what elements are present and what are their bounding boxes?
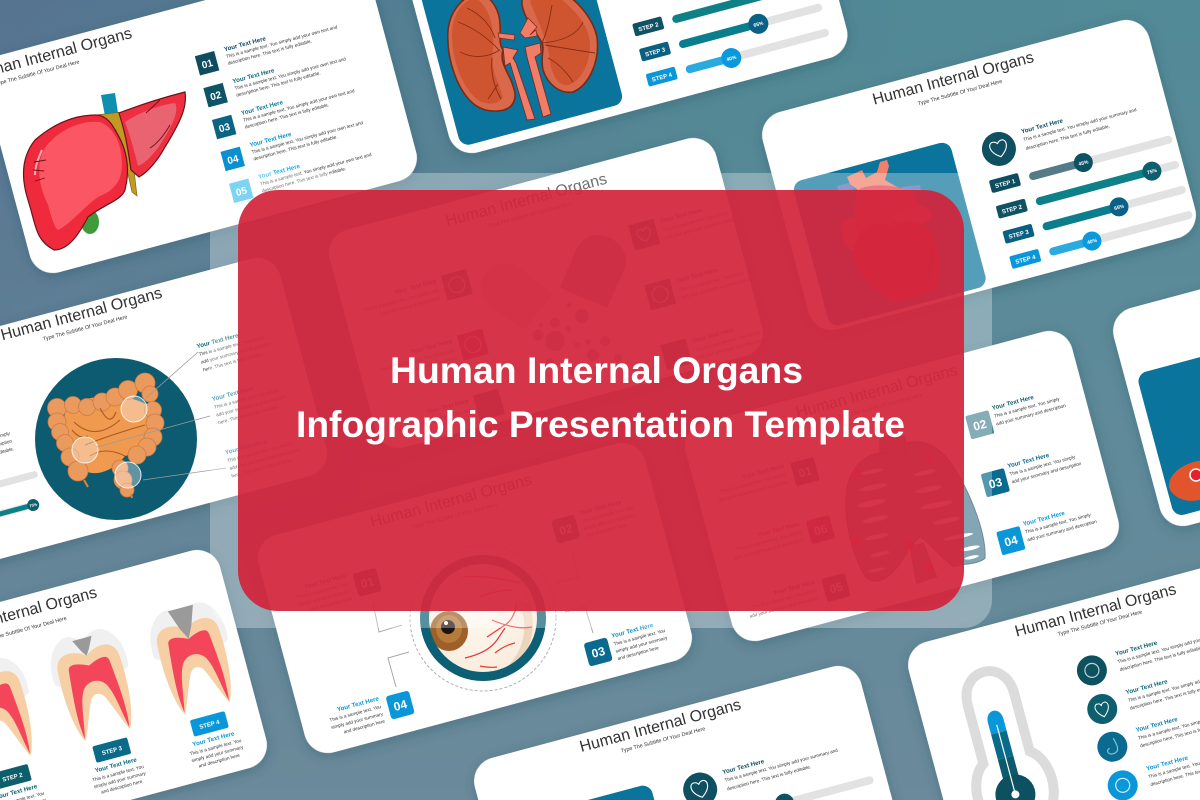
numbered list: This is a sample text. You simply add your own text and [260, 152, 372, 187]
icon: ribcage [846, 437, 985, 583]
thermometer slide title: Human Internal Organs [1013, 581, 1178, 641]
list item: brain: Your Text Here [1115, 640, 1159, 658]
heart slide subtitle: Type The Subtitle Of Your Deal Here [917, 79, 1003, 107]
item 02: 02 [558, 521, 574, 538]
text block: This is a sample text. You simply add your summary and [724, 748, 839, 783]
item 02: Your Text Here [579, 499, 623, 517]
right list: This is a sample text. You simply [694, 330, 762, 352]
numbered list: 05 [235, 185, 249, 199]
left items: This is a sample text. You simply [751, 587, 818, 610]
right list: Your Text Here [659, 207, 703, 225]
list item: brain [1074, 619, 1200, 689]
numbered list: 02 [209, 90, 223, 103]
heart image panel [792, 141, 988, 328]
text block: description here. This text is fully editable. [726, 764, 812, 792]
right items: This is a sample text. You simply [1009, 454, 1076, 477]
left list: Your Text Here [410, 338, 454, 356]
item 03: and description here [617, 645, 660, 661]
progress bars: STEP 3 [1008, 229, 1030, 241]
panel: lower heart slide [469, 661, 913, 800]
step 2 block [0, 761, 47, 800]
list item: heart [1084, 657, 1200, 727]
numbered list: Your Text Here [249, 131, 293, 149]
step 2 block: STEP 2 [2, 772, 24, 784]
image panel [1136, 333, 1200, 517]
ribcage slide subtitle: Type The Subtitle Of Your Deal Here [838, 393, 924, 421]
step 3 block [84, 735, 149, 796]
numbered list: Your Text Here [257, 163, 301, 181]
progress bars: 45% [1078, 159, 1090, 168]
right text items: here. This text is fully editable. [202, 351, 264, 372]
list item: stomach [1094, 695, 1200, 765]
list item: heart: Your Text Here [1125, 678, 1169, 696]
panel: eye slide [253, 438, 697, 758]
right list: Your Text Here [676, 267, 719, 285]
left items: This is a sample text. You simply [720, 472, 787, 494]
panel: capsule slide [324, 132, 770, 453]
item 04: simply add your summary [331, 711, 384, 730]
text block [1020, 98, 1140, 151]
left items: 05 [828, 579, 845, 597]
item 01: Your Text Here [303, 573, 347, 591]
eye slide subtitle: Type The Subtitle Of Your Deal Here [412, 502, 498, 531]
step 4 block: This is a sample text. You [189, 738, 242, 756]
item 04: This is a sample text. You [329, 704, 382, 723]
numbered list: 04 [226, 154, 240, 167]
right list [628, 198, 769, 370]
panel: kidney slide [396, 0, 853, 158]
left text and bars [0, 427, 43, 537]
right items: Your Text Here [1022, 510, 1066, 528]
panel: liver slide [0, 0, 422, 281]
right list: add your summary and description. [664, 217, 736, 240]
right items: 04 [1003, 533, 1020, 550]
left list: This is a sample text. You simply add [396, 407, 472, 432]
item 04 [326, 687, 415, 737]
right text items: Your Text Here [196, 332, 240, 350]
panel: right edge slide [1108, 211, 1200, 531]
right items: add your summary and description [996, 403, 1067, 426]
right items: Your Text Here [1007, 452, 1051, 470]
markers on ribcage [852, 454, 934, 572]
progress bars: STEP 1 [995, 179, 1017, 190]
numbered list: description here. This text is fully editable. [236, 70, 321, 98]
icon: heart [837, 160, 939, 302]
kidney image panel [411, 0, 624, 147]
icon: tooth 2 [0, 652, 46, 772]
numbered list: 01 [201, 58, 215, 72]
numbered list: This is a sample text. You simply add your own text and [242, 88, 355, 123]
image panel [495, 783, 689, 800]
numbered list [194, 17, 375, 203]
right list: This is a sample text. You simply [662, 210, 729, 233]
progress bar [732, 771, 872, 800]
left items: 06 [812, 521, 829, 539]
progress bars: 40% [1087, 238, 1098, 246]
ribcage slide title: Human Internal Organs [794, 362, 959, 422]
left items [714, 455, 851, 623]
left list: your own text and description. [396, 355, 457, 376]
right text items: add your summary and description [200, 341, 271, 365]
item 01: 01 [359, 574, 376, 591]
item 04: and description here [343, 719, 386, 734]
numbered list: description here. This text is fully editable. [227, 39, 312, 66]
step 3 block: This is a sample text. You [92, 764, 145, 783]
left list [361, 269, 505, 442]
right text items: here. This text is fully editable. [218, 404, 280, 425]
right list: add your summary and description. [680, 276, 752, 300]
kidney progress bars: STEP 2 [638, 22, 660, 33]
numbered list: description here. This text is fully editable. [253, 134, 338, 161]
item 02: This is a sample text. You [581, 505, 634, 524]
progress bars: STEP 2 [1002, 204, 1024, 216]
step 3 block: simply add your summary [93, 770, 147, 789]
panel: thermometer slide [903, 545, 1200, 800]
step 4 block: Your Text Here [192, 730, 236, 748]
text block: description here. This text is fully editable. [1025, 124, 1110, 151]
capsule slide subtitle: Type The Subtitle Of Your Deal Here [488, 201, 573, 230]
kidney progress bars: 65% [753, 20, 765, 29]
item 02 [550, 496, 639, 546]
red title panel [238, 190, 964, 611]
step 3 block: and description here [100, 779, 143, 795]
intestine slide title: Human Internal Organs [0, 285, 164, 344]
panel: heart slide [757, 15, 1200, 335]
eye slide title: Human Internal Organs [369, 472, 534, 531]
item 03: Your Text Here [611, 622, 655, 640]
right text items: This is a sample text. You simply [227, 441, 294, 463]
lower slide title: Human Internal Organs [578, 696, 743, 756]
right text items: Your Text Here [224, 438, 268, 456]
item 02: simply add your summary [583, 512, 637, 531]
right items: Your Text Here [991, 394, 1035, 412]
item 03: 03 [590, 644, 607, 661]
icon: heart badge [978, 128, 1020, 170]
main subtitle: Infographic Presentation Template [296, 403, 905, 445]
icon: capsule [481, 235, 626, 381]
numbered list: This is a sample text. You simply add your own text and [225, 24, 338, 59]
panel: ribcage slide [680, 326, 1124, 646]
item 01: and description here [310, 596, 353, 612]
item 04: Your Text Here [336, 695, 380, 713]
numbered list: Your Text Here [232, 67, 276, 85]
capsule slide title: Human Internal Organs [444, 171, 609, 230]
text block [722, 739, 841, 792]
numbered list: description here. This text is fully editable. [244, 102, 330, 130]
step 3 block: STEP 3 [101, 746, 123, 757]
left items: add your summary and description [718, 479, 789, 503]
numbered list: Your Text Here [223, 35, 267, 53]
kidney progress bars: 40% [726, 55, 738, 63]
icon: kidneys [448, 0, 598, 120]
icon: eyeball [373, 545, 593, 691]
numbered list: 03 [218, 122, 232, 135]
text block: Your Text Here [722, 758, 766, 776]
item 01 [293, 565, 382, 615]
item 01: simply add your summary [298, 589, 351, 607]
text block: Your Text Here [1020, 117, 1064, 135]
left items: add your summary and description [733, 537, 805, 561]
step 3 block: Your Text Here [94, 756, 138, 774]
icon: orange organ [1169, 460, 1200, 501]
right items: add your summary and description [1027, 519, 1098, 542]
right text items: add your summary and description [216, 394, 287, 418]
icon: heart badge [679, 769, 721, 800]
right items: 03 [987, 475, 1004, 492]
left items: Your Text Here [772, 579, 816, 597]
icon: tooth 4 [143, 597, 244, 718]
list item: stomach: Your Text Here [1135, 716, 1179, 734]
left items: Your Text Here [757, 521, 801, 539]
right text items: This is a sample text. You simply [213, 387, 281, 410]
right text items: add your summary and description [229, 447, 300, 471]
right items: This is a sample text. You simply [1025, 512, 1092, 535]
lower slide subtitle: Type The Subtitle Of Your Deal Here [620, 726, 706, 755]
numbered list: description here. This text is fully editable. [261, 166, 347, 193]
item 03: This is a sample text. You [613, 628, 666, 647]
progress bars [988, 131, 1191, 272]
panel: intestine slide [0, 253, 332, 573]
left items: Your Text Here [741, 463, 785, 481]
right items: 02 [972, 417, 989, 434]
left list: your own text and description. [380, 296, 441, 316]
intestine slide subtitle: Type The Subtitle Of Your Deal Here [42, 314, 128, 343]
right list: add your summary and description. [696, 336, 768, 360]
left list: This is a sample text. You simply add [364, 288, 440, 313]
right items [964, 386, 1099, 555]
frosted backing panel [210, 173, 992, 628]
item 03 [583, 619, 670, 669]
step 4 block [181, 709, 246, 770]
left list: Your Text Here [426, 398, 470, 416]
text block: This is a sample text. You simply add your summary and [1023, 107, 1137, 142]
right list: This is a sample text. You simply [678, 270, 745, 292]
numbered list: This is a sample text. You simply add your own text and [251, 120, 364, 155]
kidney progress bars: STEP 4 [651, 72, 673, 84]
progress bars: STEP 4 [1015, 255, 1037, 266]
numbered list: This is a sample text. You simply add your own text and [234, 56, 347, 91]
item 03: simply add your summary [615, 635, 668, 654]
left list: This is a sample text. You simply add [380, 348, 456, 372]
icon: intestines [35, 352, 226, 520]
left items: add your summary and description [749, 595, 820, 619]
right text items: Your Text Here [211, 385, 255, 403]
item 01: This is a sample text. You [296, 581, 349, 600]
list item: blue organ: Your Text Here [1145, 754, 1189, 773]
step 4 block: simply add your summary [191, 744, 244, 763]
right items: add your summary and description [1011, 461, 1082, 484]
step 4 block: STEP 4 [199, 720, 221, 731]
thermometer slide subtitle: Type The Subtitle Of Your Deal Here [1057, 610, 1143, 638]
left text and bars: 75% [29, 501, 38, 508]
progress bars: 75% [1147, 168, 1158, 176]
right list: Your Text Here [692, 327, 736, 345]
right text items: here. This text is fully editable. [231, 457, 293, 479]
numbered list: Your Text Here [240, 99, 284, 117]
heart slide title: Human Internal Organs [871, 49, 1036, 109]
right text items: This is a sample text. You simply [198, 334, 266, 357]
icon: tooth 3 [43, 623, 145, 745]
icon: thermometer [947, 662, 1064, 800]
right text items [196, 324, 303, 479]
left list: Your Text Here [394, 278, 438, 296]
kidney progress bars [632, 0, 828, 90]
kidney progress bars: STEP 3 [645, 47, 667, 59]
right items: This is a sample text. You simply [993, 396, 1061, 419]
icon: liver [24, 92, 185, 250]
main title: Human Internal Organs [390, 349, 803, 391]
item 02: and description here [585, 522, 628, 538]
panel: teeth slide [0, 545, 272, 800]
left items: 01 [797, 464, 814, 481]
list item: blue organ [1104, 733, 1200, 800]
left items: This is a sample text. You simply [735, 529, 803, 552]
item 04: 04 [392, 697, 409, 714]
step 4 block: and description here [198, 753, 241, 769]
progress bars: 65% [1114, 203, 1125, 212]
